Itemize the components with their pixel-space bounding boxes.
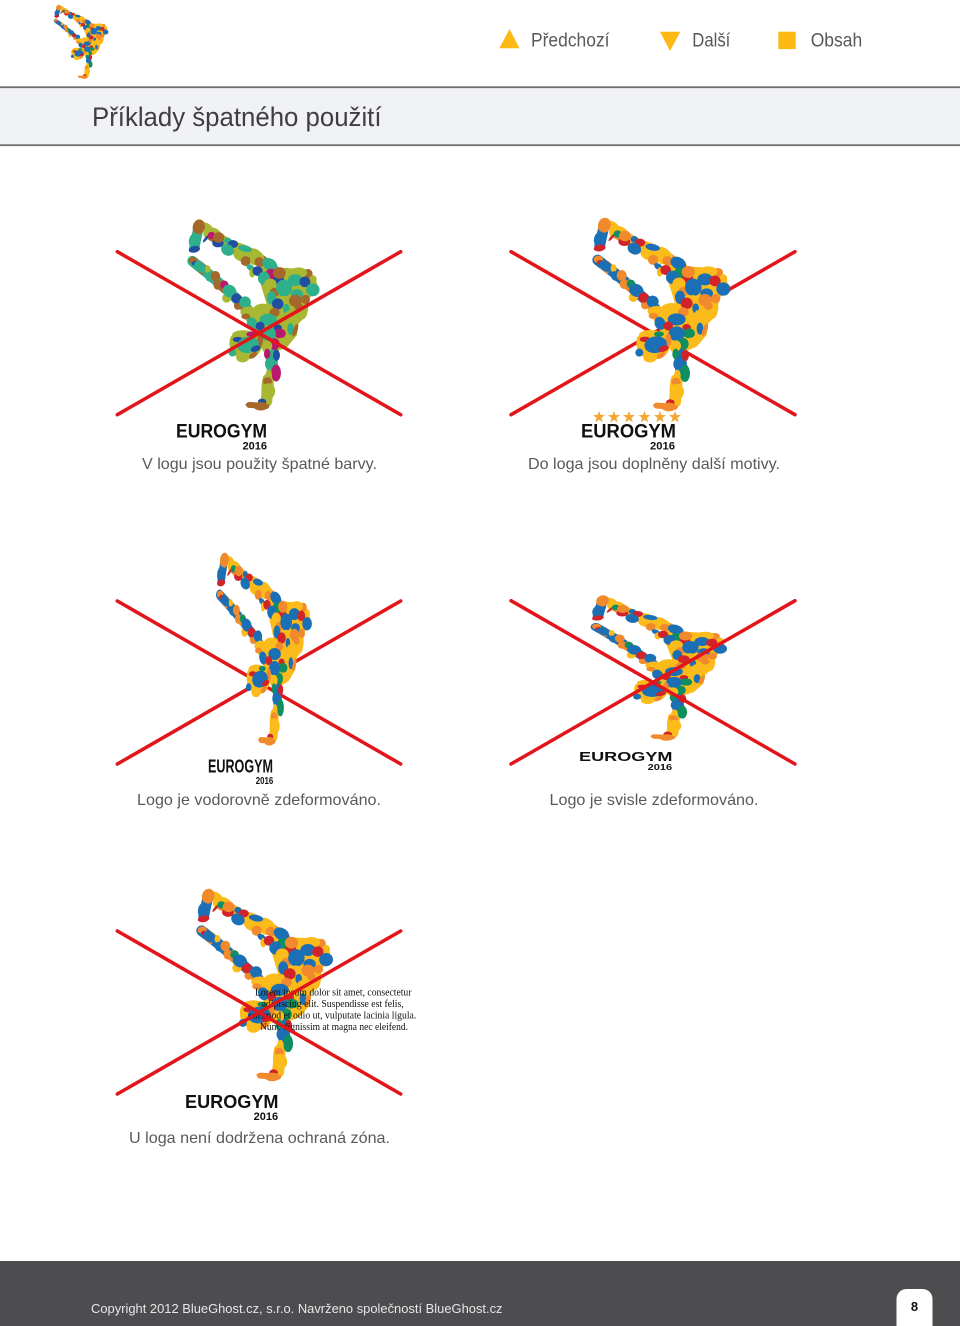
- nav label: next: Další: [692, 30, 731, 52]
- caption: V logu jsou použity špatné barvy.: [142, 456, 377, 473]
- title band: [0, 86, 960, 146]
- icon: previous triangle: [499, 29, 520, 48]
- panel: wrong colours: [117, 218, 401, 473]
- lorem ipsum text: Nunc dignissim at magna nec eleifend.: [260, 1021, 408, 1033]
- red cross: [117, 931, 401, 1094]
- red cross: [511, 252, 795, 415]
- wordmark: EUROGYM: [176, 420, 267, 442]
- wordmark: EUROGYM: [208, 756, 273, 776]
- six stars: [593, 411, 681, 422]
- logo figure: [593, 216, 730, 411]
- wordmark: EUROGYM: [185, 1091, 278, 1112]
- red cross: [117, 252, 401, 415]
- caption: Do loga jsou doplněny další motivy.: [528, 456, 780, 473]
- wordmark: EUROGYM: [581, 420, 676, 442]
- year: 2016: [256, 775, 273, 787]
- panel: extra motifs: [511, 216, 795, 473]
- title: Příklady špatného použití: [92, 102, 382, 132]
- logo figure: squat: [591, 594, 727, 741]
- copyright: Copyright 2012 BlueGhost.cz, s.r.o. Navrženo společností BlueGhost.cz: [91, 1301, 502, 1316]
- lorem ipsum text: [248, 986, 417, 1033]
- logo figure: wrong colours: [188, 218, 320, 411]
- year: 2016: [650, 440, 675, 452]
- caption: Logo je vodorovně zdeformováno.: [137, 792, 381, 809]
- logo figure: [197, 887, 333, 1081]
- lorem ipsum text: Lorem ipsum dolor sit amet, consectetur: [255, 986, 412, 998]
- year: 2016: [254, 1111, 278, 1123]
- footer: [0, 1261, 960, 1326]
- lorem ipsum text: adipiscing elit. Suspendisse est felis,: [262, 998, 404, 1010]
- icon: next triangle: [660, 32, 680, 51]
- year: 2016: [648, 763, 673, 772]
- lorem ipsum text: euismod et odio ut, vulputate lacinia ligula.: [248, 1010, 417, 1022]
- header logo: [54, 4, 108, 79]
- year: 2016: [242, 440, 267, 452]
- nav label: contents: Obsah: [811, 30, 862, 52]
- icon: contents square: [778, 32, 796, 49]
- panel: protective zone: [117, 887, 417, 1147]
- nav label: previous: Předchozí: [531, 30, 610, 52]
- navigation: [499, 29, 862, 52]
- panel: horizontally deformed: [117, 551, 401, 809]
- caption: U loga není dodržena ochraná zóna.: [129, 1130, 390, 1147]
- logo figure: narrow: [216, 551, 312, 746]
- wordmark: EUROGYM: [579, 749, 672, 764]
- page number badge: [896, 1289, 932, 1326]
- red cross: [117, 601, 401, 764]
- page number badge: 8: [911, 1299, 918, 1314]
- red cross: [511, 601, 795, 764]
- caption: Logo je svisle zdeformováno.: [550, 792, 758, 809]
- panel: vertically deformed: [511, 594, 795, 809]
